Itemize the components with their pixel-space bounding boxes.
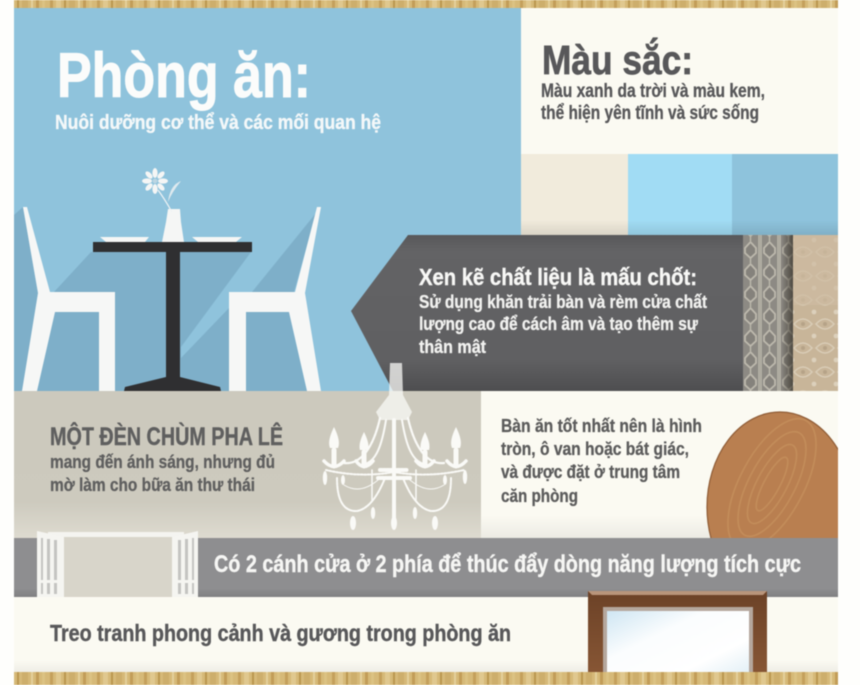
text block: mang đến ánh sáng, nhưng đủ (50, 451, 275, 472)
text block (50, 451, 275, 495)
text: Treo tranh phong cảnh và gương trong phòng ăn (50, 620, 511, 646)
icon: open double doors (37, 531, 198, 597)
text block (419, 291, 707, 357)
text block: và được đặt ở trung tâm (501, 461, 680, 482)
subtitle: Nuôi dưỡng cơ thể và các mối quan hệ (55, 111, 381, 134)
panel: colour heading (521, 8, 838, 154)
text block: thân mật (419, 336, 486, 357)
title: Phòng ăn: (57, 41, 311, 111)
text block (541, 81, 765, 124)
heading: Màu sắc: (542, 37, 693, 83)
text block (501, 415, 702, 506)
icon: table with vase and plates (93, 168, 252, 391)
top wood strip (14, 0, 838, 8)
icon: right chair (229, 207, 321, 391)
icon: framed mirror (588, 591, 767, 681)
icon: left chair (22, 207, 115, 391)
text block: tròn, ô van hoặc bát giác, (501, 438, 689, 459)
text block: lượng cao để cách âm và tạo thêm sự (419, 313, 698, 334)
icon: round wooden table (706, 410, 839, 539)
colour swatches (521, 154, 838, 235)
panel: door banner (14, 531, 838, 597)
text block: Bàn ăn tốt nhất nên là hình (501, 415, 702, 436)
panel: dining room scene (14, 8, 521, 391)
text block: căn phòng (501, 485, 578, 506)
fabric samples (743, 235, 838, 391)
icon: chandelier (323, 363, 467, 530)
text block: thể hiện yên tĩnh và sức sống (541, 103, 759, 124)
text block: Sử dụng khăn trải bàn và rèm cửa chất (419, 291, 707, 312)
heading: Xen kẽ chất liệu là mấu chốt: (419, 264, 697, 290)
heading: MỘT ĐÈN CHÙM PHA LÊ (50, 421, 283, 451)
bottom wood strip (14, 672, 838, 685)
panel: table shape (481, 392, 839, 539)
panel: materials arrow (351, 235, 743, 391)
panel: paintings and mirrors (14, 591, 838, 681)
illustration shadows (14, 207, 316, 391)
text block: Màu xanh da trời và màu kem, (541, 81, 765, 102)
panel: chandelier (14, 391, 481, 538)
text block: mờ làm cho bữa ăn thư thái (50, 474, 255, 495)
